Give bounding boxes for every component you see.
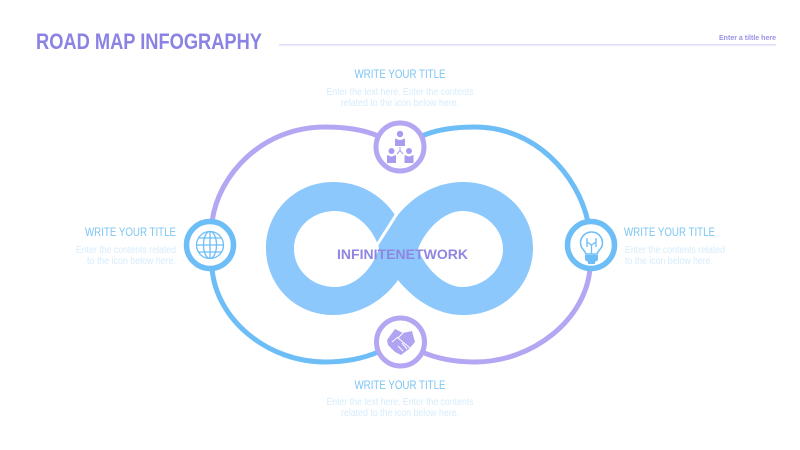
heading: WRITE YOUR TITLE: [354, 378, 446, 392]
infinity band: [266, 182, 533, 315]
infinity overlap gap: [377, 212, 398, 245]
header: [36, 29, 776, 54]
outer infinity loop: [212, 127, 590, 362]
body: Enter the contents related: [76, 245, 176, 256]
title: ROAD MAP INFOGRAPHY: [36, 29, 262, 54]
center label: INFINITENETWORK: [337, 246, 468, 262]
loop segment: bottom left: [212, 268, 378, 362]
icon: globe: [196, 232, 224, 258]
body: related to the icon below here.: [341, 98, 459, 109]
body: Enter the contents related: [625, 245, 725, 256]
left node: [186, 222, 234, 268]
body: to the icon below here.: [625, 256, 713, 267]
text block: left: [76, 225, 176, 267]
text block: bottom: [326, 378, 474, 419]
node ring: [376, 318, 424, 366]
body: Enter the text here. Enter the contents: [326, 397, 474, 408]
icon: light bulb: [581, 232, 602, 264]
heading: WRITE YOUR TITLE: [624, 225, 715, 239]
heading: WRITE YOUR TITLE: [85, 225, 176, 239]
text block: top: [326, 67, 474, 109]
node ring: [568, 222, 614, 268]
bottom node: [376, 318, 424, 366]
body: Enter the text here. Enter the contents: [326, 87, 474, 98]
icon: team hierarchy: [387, 131, 414, 163]
top node: [376, 123, 424, 171]
central infinity symbol: [266, 182, 533, 315]
header rule: [279, 44, 776, 46]
header subtitle: Enter a tiltle here: [719, 33, 776, 42]
body: related to the icon below here.: [341, 408, 459, 419]
loop segment: top right: [422, 127, 588, 222]
body: to the icon below here.: [87, 256, 176, 267]
heading: WRITE YOUR TITLE: [354, 67, 446, 81]
icon: handshake: [387, 329, 415, 355]
loop segment: bottom right: [422, 268, 590, 362]
node ring: [186, 222, 234, 268]
right node: [568, 222, 614, 268]
text block: right: [624, 225, 725, 267]
loop segment: top left: [212, 127, 378, 222]
node ring: [376, 123, 424, 171]
